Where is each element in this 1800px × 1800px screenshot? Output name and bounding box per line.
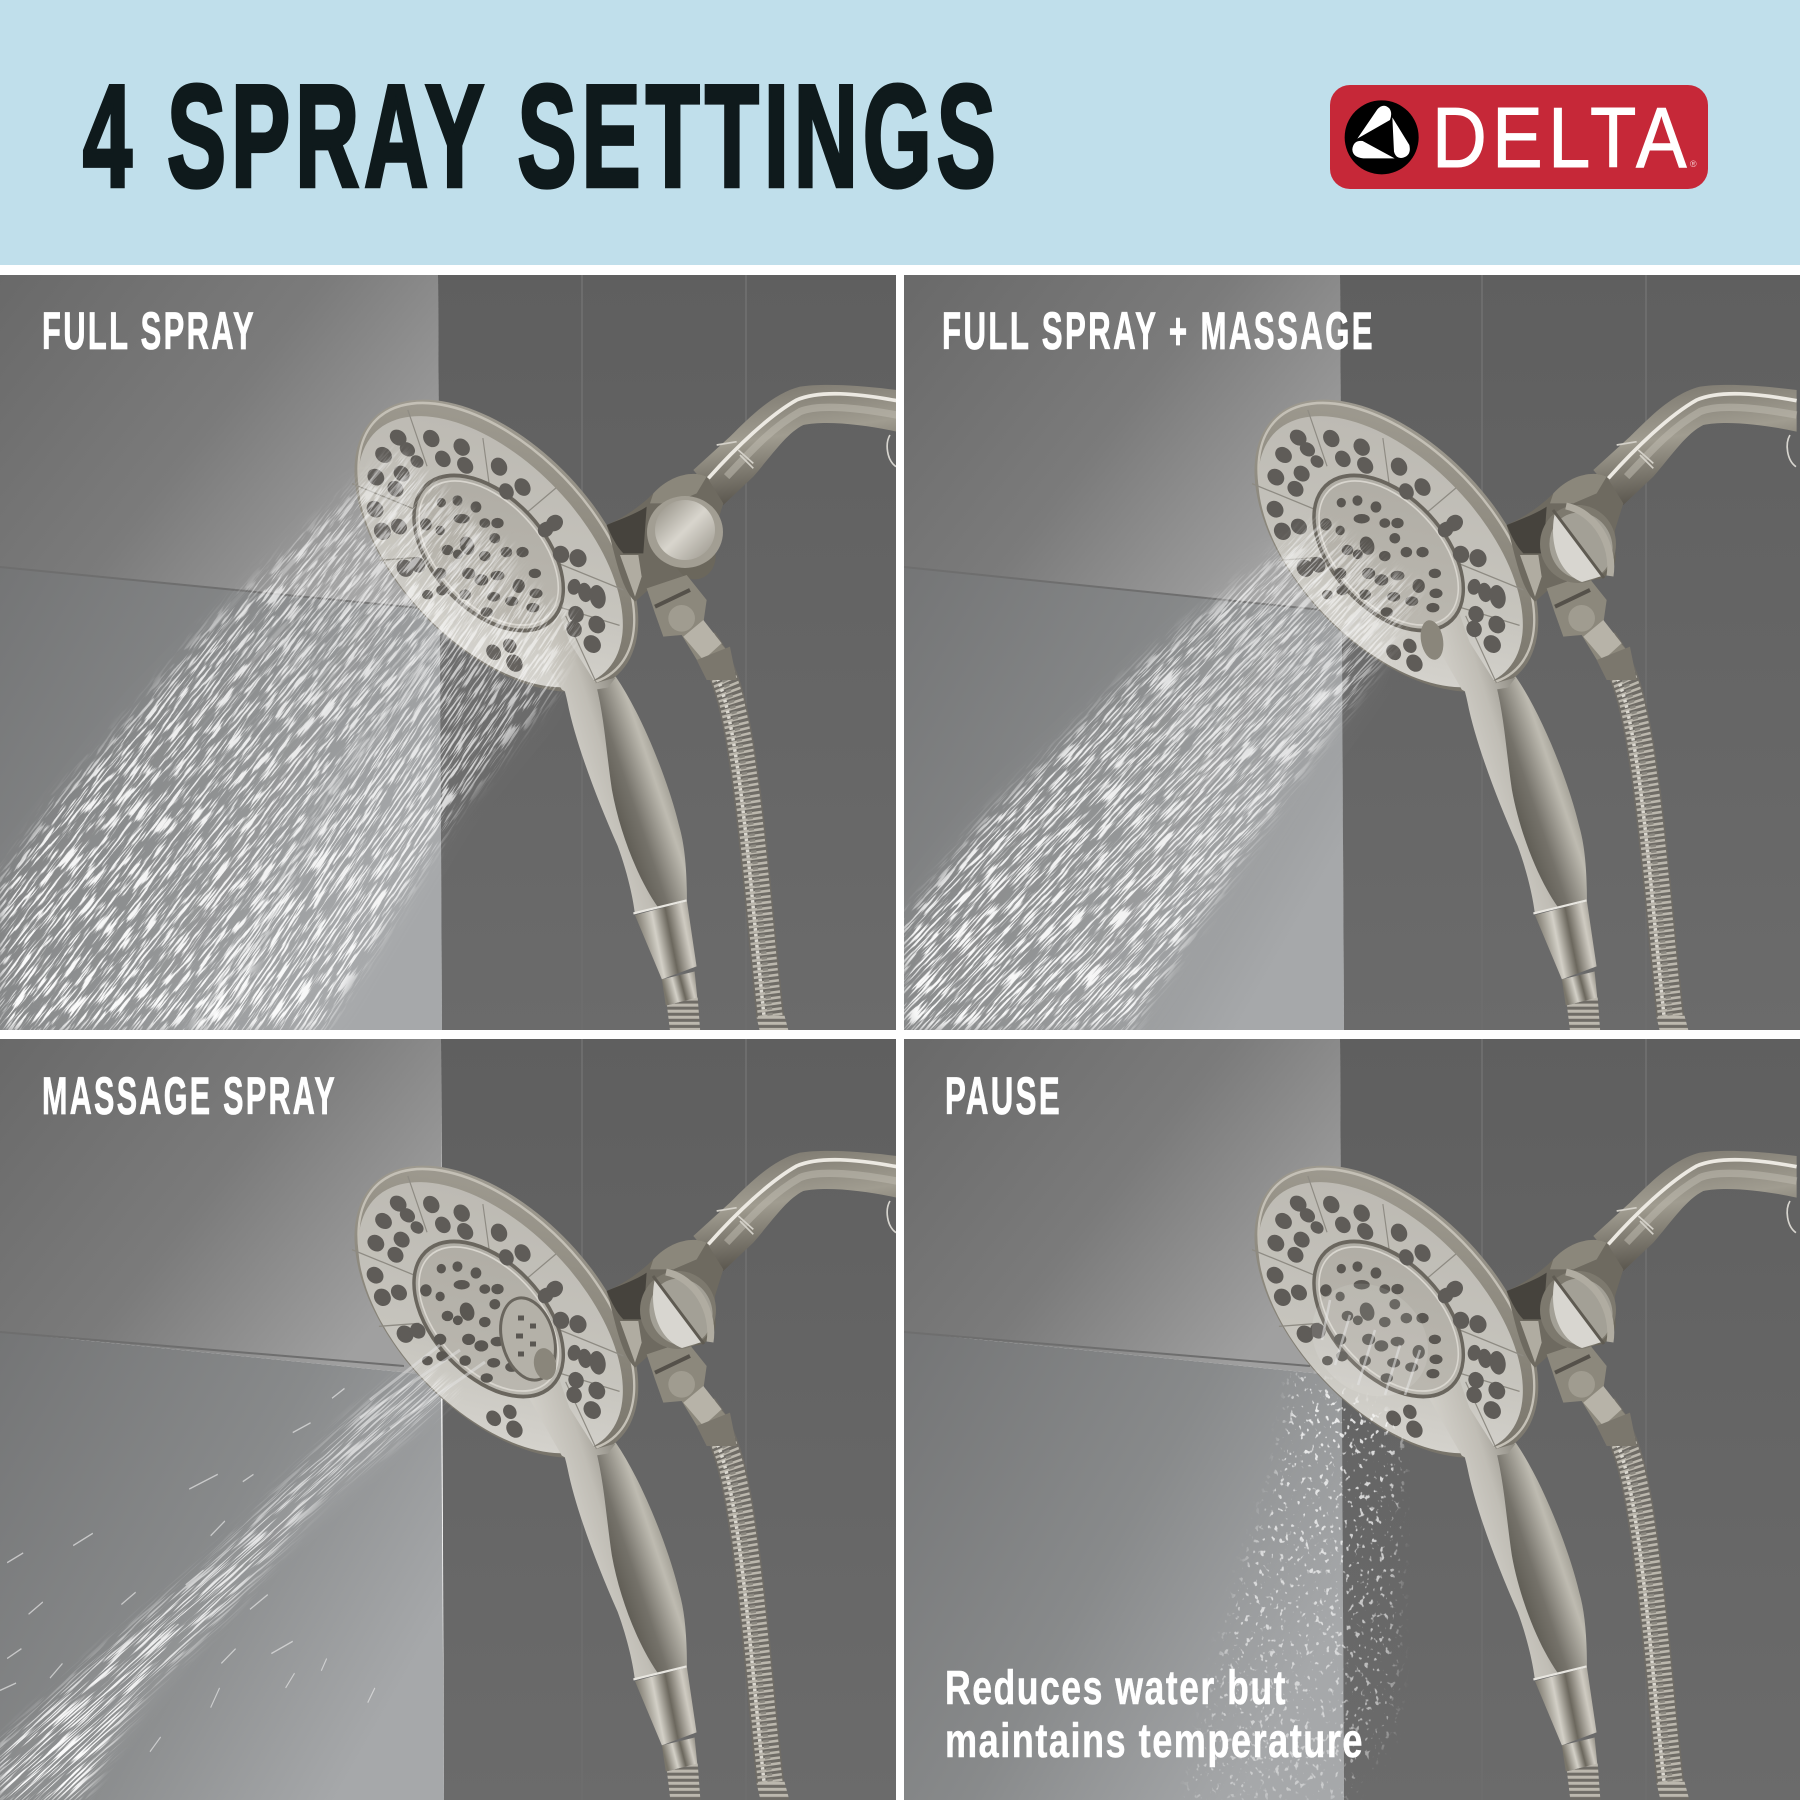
label: pause: PAUSE (945, 1067, 1062, 1126)
note: maintains temperature: maintains temperature (945, 1715, 1364, 1768)
label: massage spray: MASSAGE SPRAY (42, 1067, 337, 1126)
hand shower fixture (307, 343, 897, 1034)
right wall (438, 275, 896, 1030)
logo emblem (1345, 100, 1419, 174)
massage sub-disc (492, 1292, 564, 1386)
spray toggle (1420, 620, 1444, 660)
right wall (441, 1039, 896, 1800)
near-head fine jets (1086, 518, 1422, 854)
label: full spray: FULL SPRAY (42, 302, 256, 361)
water spray (0, 1364, 615, 1800)
header band (0, 0, 1800, 265)
logo: Delta (1330, 85, 1708, 189)
hand shower fixture (1207, 343, 1797, 1034)
hand shower fixture (307, 1109, 897, 1800)
registered mark: ® (1690, 159, 1697, 169)
swivel cup (647, 496, 723, 568)
left wall lower (904, 1332, 1344, 1800)
spray toggle (531, 1346, 559, 1382)
panel: massage spray (0, 1039, 897, 1800)
left wall lower (904, 567, 1344, 1030)
title: 4 SPRAY SETTINGS (83, 55, 1001, 217)
panel: full spray (0, 275, 896, 1030)
left wall upper (0, 275, 440, 610)
tile seam (0, 567, 440, 610)
left wall upper (904, 1039, 1342, 1376)
tile seam (904, 1332, 1310, 1366)
left wall upper (904, 275, 1342, 612)
swivel cup slotted (1540, 502, 1616, 583)
water jet near head (360, 1345, 485, 1428)
panel: full spray + massage (904, 275, 1800, 1030)
water on spray face (1289, 1260, 1451, 1420)
tile seam (0, 1332, 404, 1366)
water spray lower fan (186, 557, 582, 1030)
spray wash (0, 1364, 457, 1800)
logo badge (1330, 85, 1708, 189)
swivel cup slotted (639, 1268, 723, 1356)
note: reduces water: Reduces water but (945, 1662, 1287, 1715)
water spray upper fan (0, 448, 521, 1030)
right wall (1340, 275, 1800, 1030)
label: full spray + massage: FULL SPRAY + MASSAGE (942, 302, 1375, 361)
spray wash (933, 602, 1354, 1000)
panel: pause (904, 1039, 1800, 1800)
near-head fine jets (180, 449, 522, 789)
swivel cup slotted (1539, 1268, 1623, 1356)
left wall lower (0, 567, 442, 1030)
left wall lower (0, 1332, 444, 1800)
tile seam (904, 567, 1342, 612)
logo wordmark: DELTA (1432, 91, 1692, 186)
left wall upper (0, 1039, 441, 1376)
spray wash (397, 564, 432, 599)
right wall (1340, 1039, 1800, 1800)
hand shower fixture (1207, 1109, 1797, 1800)
water droplets (1180, 1370, 1410, 1800)
stray droplets (0, 1388, 375, 1752)
water spray (536, 219, 1740, 1418)
